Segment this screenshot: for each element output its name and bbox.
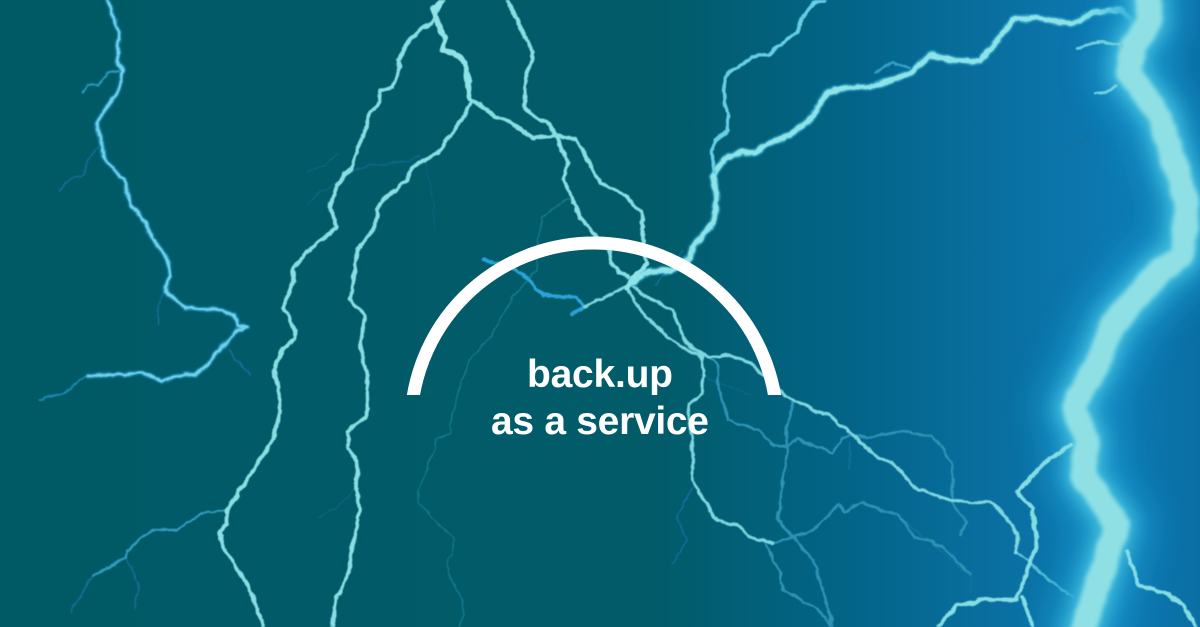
arc emblem <box>406 236 782 395</box>
bolt from arc centre to upper right <box>585 9 1135 307</box>
bolt: second trunk <box>332 102 472 627</box>
bolt: top middle <box>507 0 633 282</box>
left bolt <box>40 0 248 400</box>
bolt: top fork right <box>470 98 648 278</box>
smaller bolts branching from the main bolt <box>937 42 1195 627</box>
title: as a service <box>491 400 709 443</box>
bolt: far-left trunk <box>220 3 440 627</box>
main thick bolt on the right <box>1073 0 1187 627</box>
central bright bolts <box>220 0 648 627</box>
bolts crossing the arc toward lower right <box>627 283 1017 552</box>
dim blue side branches <box>60 48 1093 612</box>
blue branch under the arc <box>482 259 585 313</box>
faint distant bolts <box>418 197 570 627</box>
thin mid-network bolts <box>700 352 1073 627</box>
title <box>491 353 709 443</box>
upper thin bolt <box>712 0 910 173</box>
bolt: trunk top thick section <box>433 0 470 98</box>
lower-left branch <box>92 510 227 576</box>
title: back.up <box>527 353 673 396</box>
